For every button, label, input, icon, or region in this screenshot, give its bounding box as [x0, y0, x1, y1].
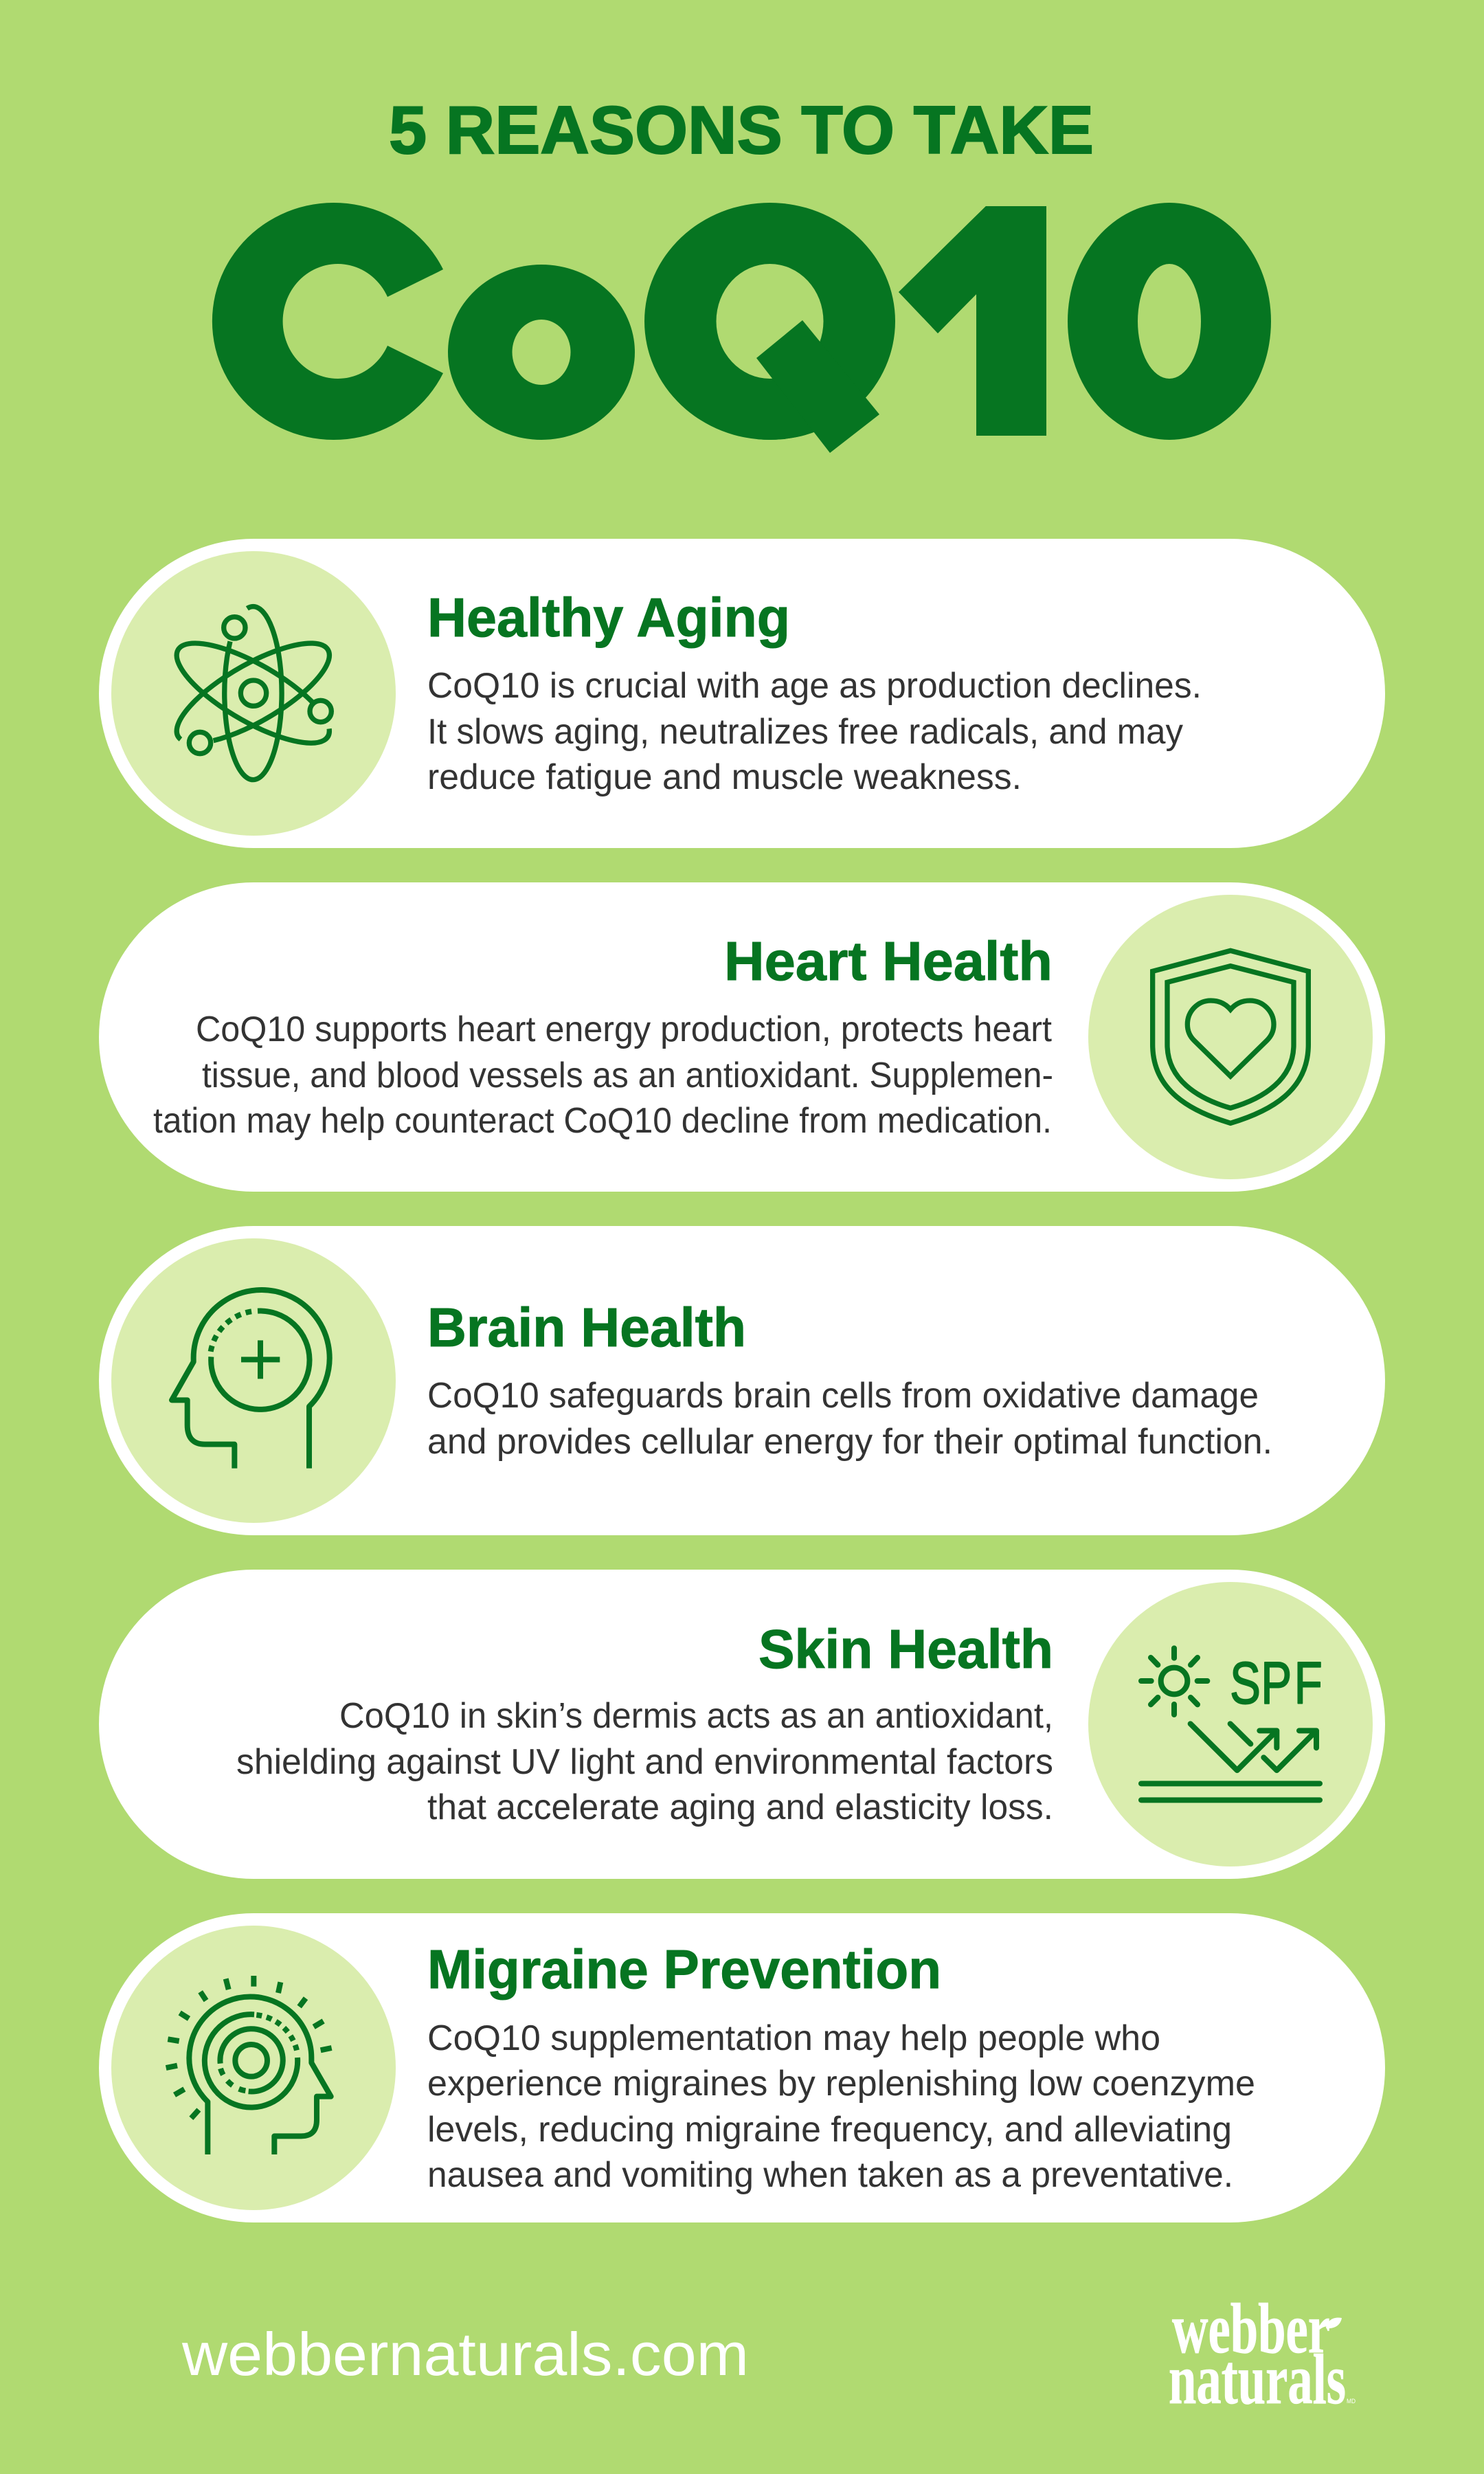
- heading: Brain Health: [427, 1297, 746, 1358]
- icon: head with radiating rings: [166, 1976, 332, 2154]
- body text: CoQ10 supports heart energy production, protects heart: [196, 1010, 1053, 1049]
- main title: CoQ10: o: [442, 163, 640, 493]
- main title: CoQ10: 0: [1063, 156, 1276, 486]
- panel: migraine prevention: [99, 1913, 1385, 2222]
- icon: leaf: [1326, 2318, 1342, 2328]
- body text: CoQ10 supplementation may help people who: [427, 2018, 1160, 2058]
- icon: sun, SPF and reflected rays: SPF: [1230, 1651, 1323, 1717]
- icon: head with plus: [172, 1290, 330, 1469]
- body text: and provides cellular energy for their optimal function.: [427, 1422, 1272, 1462]
- heading: Healthy Aging: [427, 587, 790, 648]
- logo: webber naturals: webber: [1172, 2289, 1330, 2368]
- body text: [236, 1696, 1053, 1827]
- body text: levels, reducing migraine frequency, and alleviating: [427, 2110, 1232, 2150]
- body text: tation may help counteract CoQ10 decline from medication.: [153, 1101, 1052, 1141]
- heading: Skin Health: [758, 1618, 1053, 1680]
- body text: [427, 2018, 1255, 2195]
- body text: It slows aging, neutralizes free radicals, and may: [427, 712, 1183, 752]
- body text: shielding against UV light and environmental factors: [236, 1742, 1053, 1782]
- body text: [427, 1376, 1272, 1462]
- title: [212, 105, 1271, 453]
- footer url: webbernaturals.com: [181, 2320, 749, 2388]
- body text: nausea and vomiting when taken as a preventative.: [427, 2155, 1233, 2195]
- subtitle: 5 reasons to take: 5 REASONS TO TAKE: [389, 92, 1094, 168]
- body text: [153, 1010, 1053, 1141]
- logo: webber naturals: [1169, 2289, 1356, 2419]
- logo: webber naturals: MD: [1347, 2398, 1356, 2405]
- icon: sun, SPF and reflected rays: [1141, 1648, 1323, 1800]
- body text: reduce fatigue and muscle weakness.: [427, 757, 1022, 797]
- main title: CoQ10: [212, 203, 1271, 453]
- body text: CoQ10 in skin’s dermis acts as an antioxidant,: [339, 1696, 1053, 1736]
- heading: Heart Health: [724, 930, 1053, 992]
- icon: atom: [177, 607, 331, 780]
- body text: CoQ10 safeguards brain cells from oxidative damage: [427, 1376, 1259, 1416]
- logo: webber naturals: naturals: [1169, 2340, 1346, 2419]
- heading: Migraine Prevention: [427, 1939, 941, 2000]
- main title: CoQ10: 1: [897, 148, 1074, 487]
- panel: healthy aging: [99, 539, 1385, 848]
- panel: heart health: [99, 882, 1385, 1192]
- main title: CoQ10: C: [207, 157, 453, 486]
- panel: skin health: [99, 1570, 1385, 1879]
- body text: that accelerate aging and elasticity loss.: [427, 1787, 1053, 1827]
- body text: [427, 666, 1202, 797]
- main title: CoQ10: Q: [643, 155, 896, 486]
- icon: shield with heart: [1153, 950, 1308, 1123]
- body text: tissue, and blood vessels as an antioxidant. Supplemen-: [202, 1056, 1053, 1095]
- body text: CoQ10 is crucial with age as production declines.: [427, 666, 1202, 706]
- body text: experience migraines by replenishing low coenzyme: [427, 2064, 1255, 2104]
- panel: brain health: [99, 1226, 1385, 1535]
